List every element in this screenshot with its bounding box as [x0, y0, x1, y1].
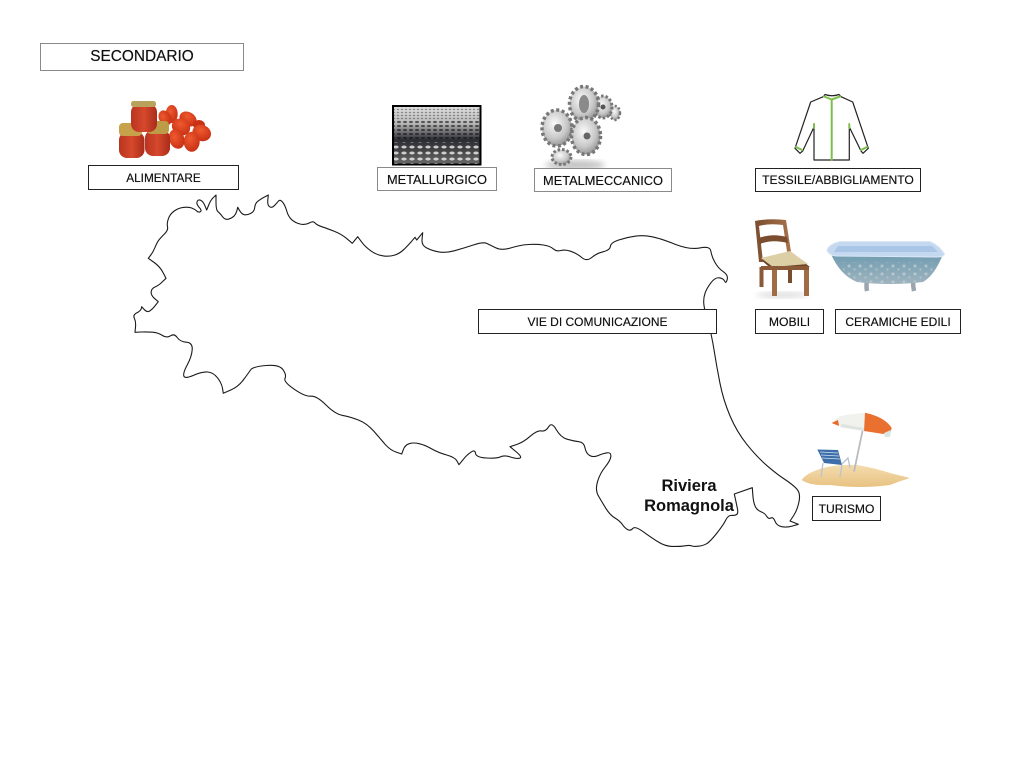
- map text: Riviera Romagnola: Romagnola: [644, 496, 734, 514]
- label: MOBILI: [755, 309, 824, 334]
- label: TESSILE/ABBIGLIAMENTO: [755, 168, 921, 192]
- label: TURISMO: [812, 496, 881, 521]
- label: METALMECCANICO: [534, 168, 672, 192]
- label: VIE DI COMUNICAZIONE: [478, 309, 717, 334]
- icon: gears: [542, 86, 620, 170]
- icon: metal mesh: [393, 106, 480, 164]
- label: ALIMENTARE: [88, 165, 239, 190]
- label: ALIMENTARE: ALIMENTARE: [126, 170, 201, 184]
- label: TURISMO: TURISMO: [819, 502, 874, 516]
- label: TESSILE/ABBIGLIAMENTO: TESSILE/ABBIGLIAMENTO: [762, 173, 914, 187]
- label: MOBILI: MOBILI: [769, 314, 810, 328]
- label: METALLURGICO: METALLURGICO: [387, 172, 487, 186]
- label: VIE DI COMUNICAZIONE: VIE DI COMUNICAZIONE: [527, 314, 668, 328]
- map text: Riviera Romagnola: Riviera: [661, 477, 717, 495]
- map text: Riviera Romagnola: [644, 477, 734, 514]
- icon: tomato jars: [119, 101, 213, 158]
- icon: bathtub: [827, 242, 944, 291]
- label: CERAMICHE EDILI: CERAMICHE EDILI: [845, 314, 951, 328]
- icon: chair: [755, 219, 810, 298]
- title box: SECONDARIO: [40, 43, 244, 71]
- icon: shirt: [795, 94, 868, 160]
- title box: SECONDARIO: SECONDARIO: [90, 48, 194, 65]
- label: METALLURGICO: [377, 167, 497, 191]
- label: METALMECCANICO: METALMECCANICO: [543, 172, 663, 188]
- label: CERAMICHE EDILI: [835, 309, 961, 334]
- map outline: Emilia-Romagna: [134, 195, 800, 546]
- icon: beach umbrella and deck chair: [802, 413, 910, 487]
